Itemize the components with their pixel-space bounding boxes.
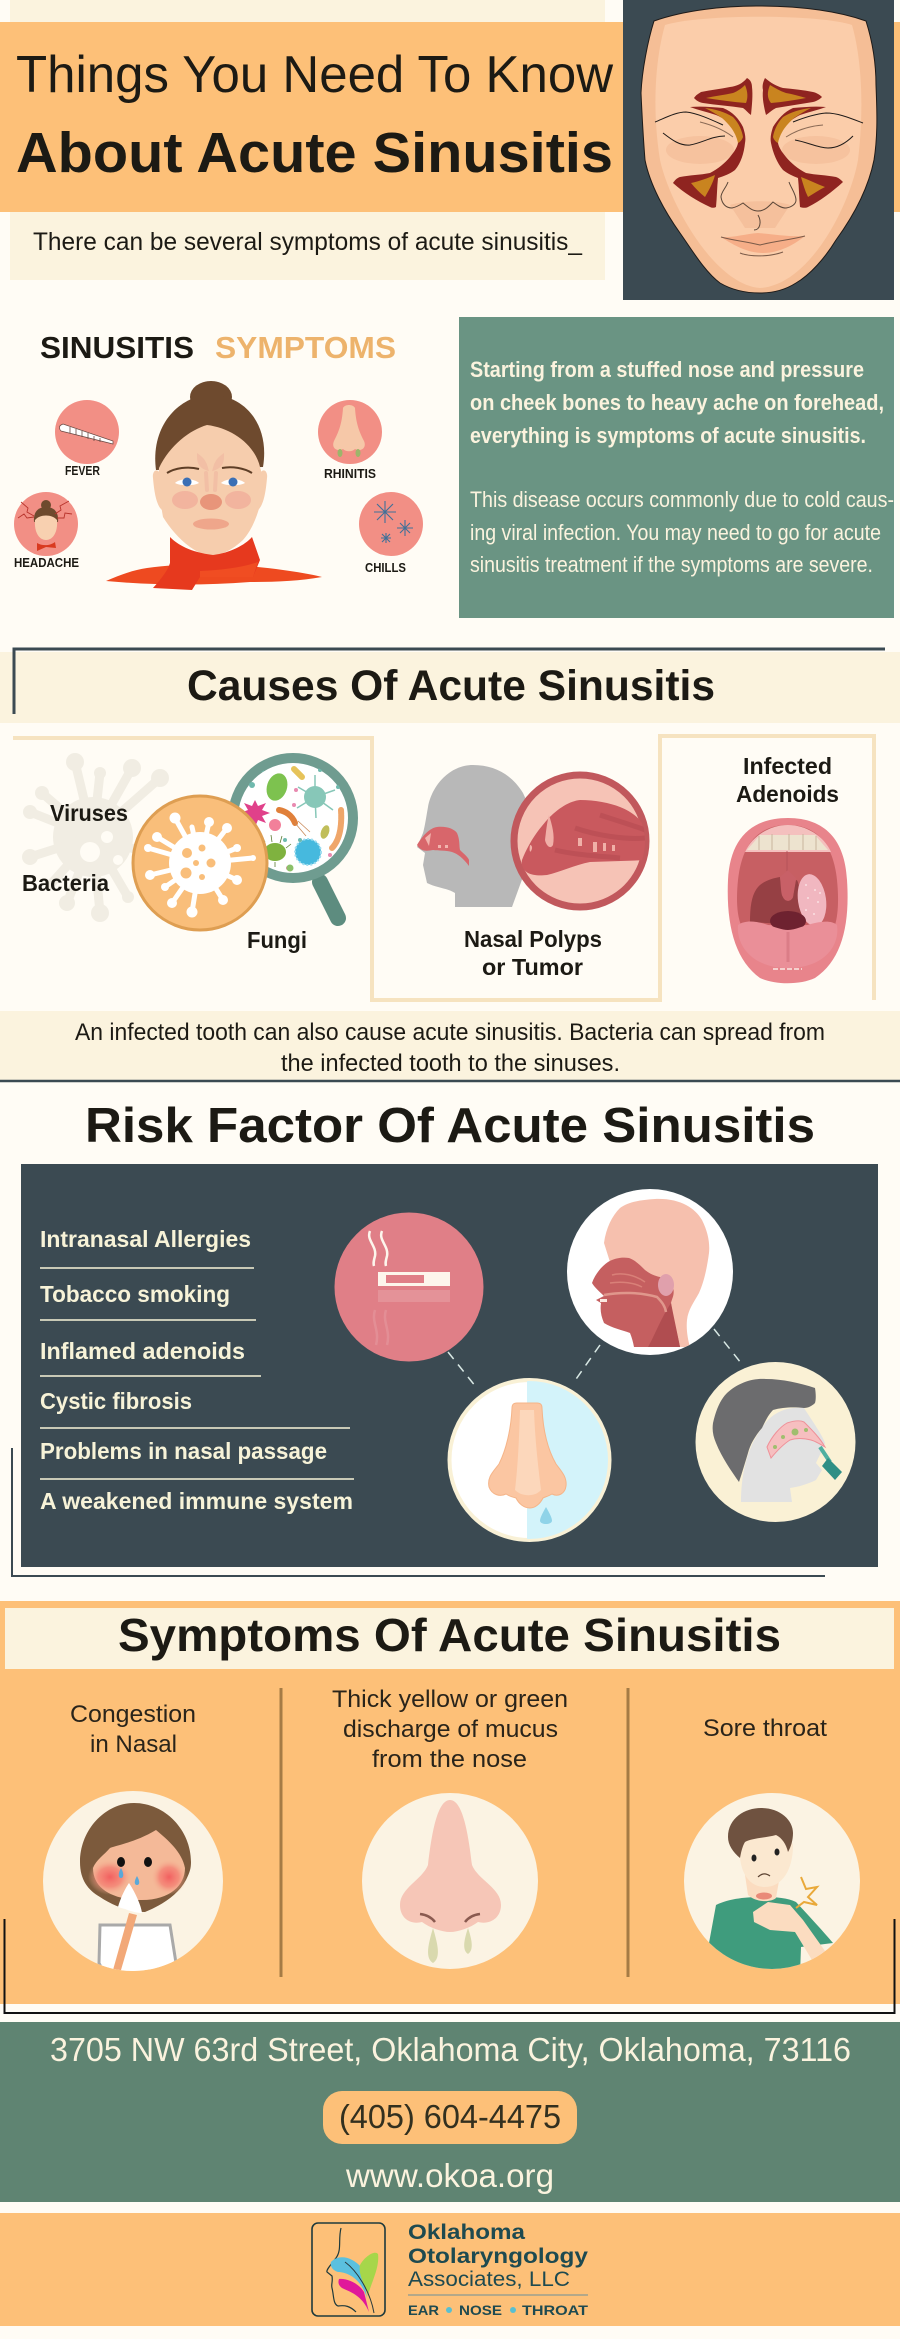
section: causes heading bbox=[0, 649, 900, 723]
text: symptoms intro bbox=[470, 357, 884, 448]
icon: fever bbox=[55, 400, 119, 478]
logo text bbox=[408, 2221, 589, 2318]
illustration: viruses bacteria fungi bbox=[22, 753, 353, 953]
list: risk factors: Inflamed adenoids bbox=[40, 1338, 245, 1364]
faded virus bbox=[22, 753, 169, 922]
phone button: (405) 604-4475 bbox=[339, 2098, 561, 2135]
phone button bbox=[323, 2091, 577, 2144]
callout: infected tooth: the infected tooth to the sinuses. bbox=[281, 1050, 620, 1077]
subtitle: There can be several symptoms of acute sinusitis_ bbox=[33, 228, 583, 256]
symptom: sore throat bbox=[684, 1715, 860, 1975]
heading: symptoms: Symptoms Of Acute Sinusitis bbox=[118, 1609, 781, 1661]
address: 3705 NW 63rd Street, Oklahoma City, Oklahoma, 73116 bbox=[50, 2031, 851, 2068]
title bbox=[16, 46, 613, 185]
contact panel bbox=[0, 2022, 900, 2202]
symptom: congestion: in Nasal bbox=[90, 1731, 177, 1758]
text: symptoms intro: Starting from a stuffed nose and pressure bbox=[470, 357, 864, 382]
heading: symptoms bbox=[5, 1608, 894, 1669]
logo band bbox=[0, 2213, 900, 2326]
label: nasal polyps bbox=[464, 926, 602, 980]
panel frames: causes bbox=[13, 736, 874, 1000]
orange virus circle bbox=[133, 796, 267, 930]
grey head bbox=[417, 765, 540, 907]
symptom: mucus discharge: Thick yellow or green bbox=[332, 1686, 568, 1713]
label: viruses: Viruses bbox=[50, 800, 128, 826]
callout: infected tooth bbox=[0, 1011, 900, 1080]
frame line around symptoms bbox=[4, 1919, 894, 2013]
header section bbox=[0, 0, 900, 300]
icon: chills: CHILLS bbox=[365, 560, 406, 575]
text: disease note bbox=[470, 487, 894, 577]
list: risk factors: Problems in nasal passage bbox=[40, 1438, 327, 1464]
label: infected adenoids: Adenoids bbox=[736, 781, 839, 807]
title: About Acute Sinusitis bbox=[16, 121, 613, 185]
list: risk factors: Tobacco smoking bbox=[40, 1281, 230, 1307]
logo text: NOSE bbox=[459, 2302, 502, 2318]
heading: sinusitis symptoms: SYMPTOMS bbox=[215, 330, 396, 365]
illustration: woman with scarf bbox=[106, 381, 322, 590]
label: infected adenoids bbox=[736, 753, 839, 807]
list: risk factors bbox=[40, 1226, 354, 1514]
logo text: EAR bbox=[408, 2302, 439, 2318]
logo text: Oklahoma bbox=[408, 2221, 525, 2244]
symptom: congestion bbox=[43, 1701, 223, 1975]
icon: rhinitis bbox=[318, 400, 382, 481]
label: fungi: Fungi bbox=[247, 927, 307, 953]
icon: runny nose bbox=[450, 1375, 615, 1545]
label: nasal polyps: or Tumor bbox=[482, 954, 583, 980]
label: infected adenoids: Infected bbox=[743, 753, 832, 779]
panel: sinusitis symptoms illustration bbox=[14, 330, 423, 590]
label: bacteria: Bacteria bbox=[22, 870, 109, 896]
section: symptoms of acute sinusitis bbox=[0, 1601, 900, 2004]
callout: infected tooth: An infected tooth can also cause acute sinusitis. Bacteria can spread from bbox=[75, 1019, 825, 1046]
icon: chills bbox=[359, 492, 423, 575]
logo icon bbox=[312, 2223, 385, 2316]
icon: fever: FEVER bbox=[65, 463, 100, 478]
icon: rhinitis: RHINITIS bbox=[324, 466, 376, 481]
icon: headache bbox=[14, 492, 79, 570]
list: risk factors: Cystic fibrosis bbox=[40, 1388, 192, 1414]
panel: intro text bbox=[459, 317, 894, 618]
panel: risk factors bbox=[12, 1164, 878, 1576]
label: nasal polyps: Nasal Polyps bbox=[464, 926, 602, 952]
symptom: mucus discharge bbox=[332, 1686, 568, 1969]
icon: head cross-section bbox=[567, 1189, 733, 1355]
mouth bbox=[728, 818, 848, 983]
website: www.okoa.org bbox=[345, 2157, 554, 2194]
heading: risk factor: Risk Factor Of Acute Sinusitis bbox=[85, 1099, 815, 1153]
illustration: nasal polyps bbox=[417, 765, 650, 980]
icon: girl with tissue bbox=[43, 1791, 223, 1975]
symptom: sore throat: Sore throat bbox=[703, 1715, 827, 1742]
magnifier bbox=[233, 758, 353, 918]
symptom: mucus discharge: from the nose bbox=[372, 1746, 527, 1773]
heading: sinusitis symptoms bbox=[40, 330, 396, 365]
icon: headache: HEADACHE bbox=[14, 555, 79, 570]
heading: sinusitis symptoms: SINUSITIS bbox=[40, 330, 194, 365]
icon: cigarette bbox=[334, 1212, 484, 1362]
icon: nose with mucus bbox=[362, 1793, 538, 1969]
list: risk factors: A weakened immune system bbox=[40, 1488, 353, 1514]
illustration: infected adenoids bbox=[728, 753, 848, 983]
section: causes heading: Causes Of Acute Sinusitis bbox=[187, 662, 715, 710]
connector lines bbox=[448, 1329, 741, 1387]
list: risk factors: Intranasal Allergies bbox=[40, 1226, 251, 1252]
illustration: face with sinuses bbox=[623, 0, 894, 300]
icon: boy with sore throat bbox=[684, 1793, 860, 1975]
title: Things You Need To Know bbox=[16, 46, 613, 104]
icon: nasal spray bbox=[696, 1362, 856, 1522]
symptom: congestion: Congestion bbox=[70, 1701, 196, 1728]
symptom: mucus discharge: discharge of mucus bbox=[343, 1716, 558, 1743]
zoomed polyp circle bbox=[514, 775, 646, 907]
logo text: Otolaryngology bbox=[408, 2245, 588, 2268]
logo text: Associates, LLC bbox=[408, 2268, 570, 2291]
logo text: THROAT bbox=[522, 2302, 589, 2318]
